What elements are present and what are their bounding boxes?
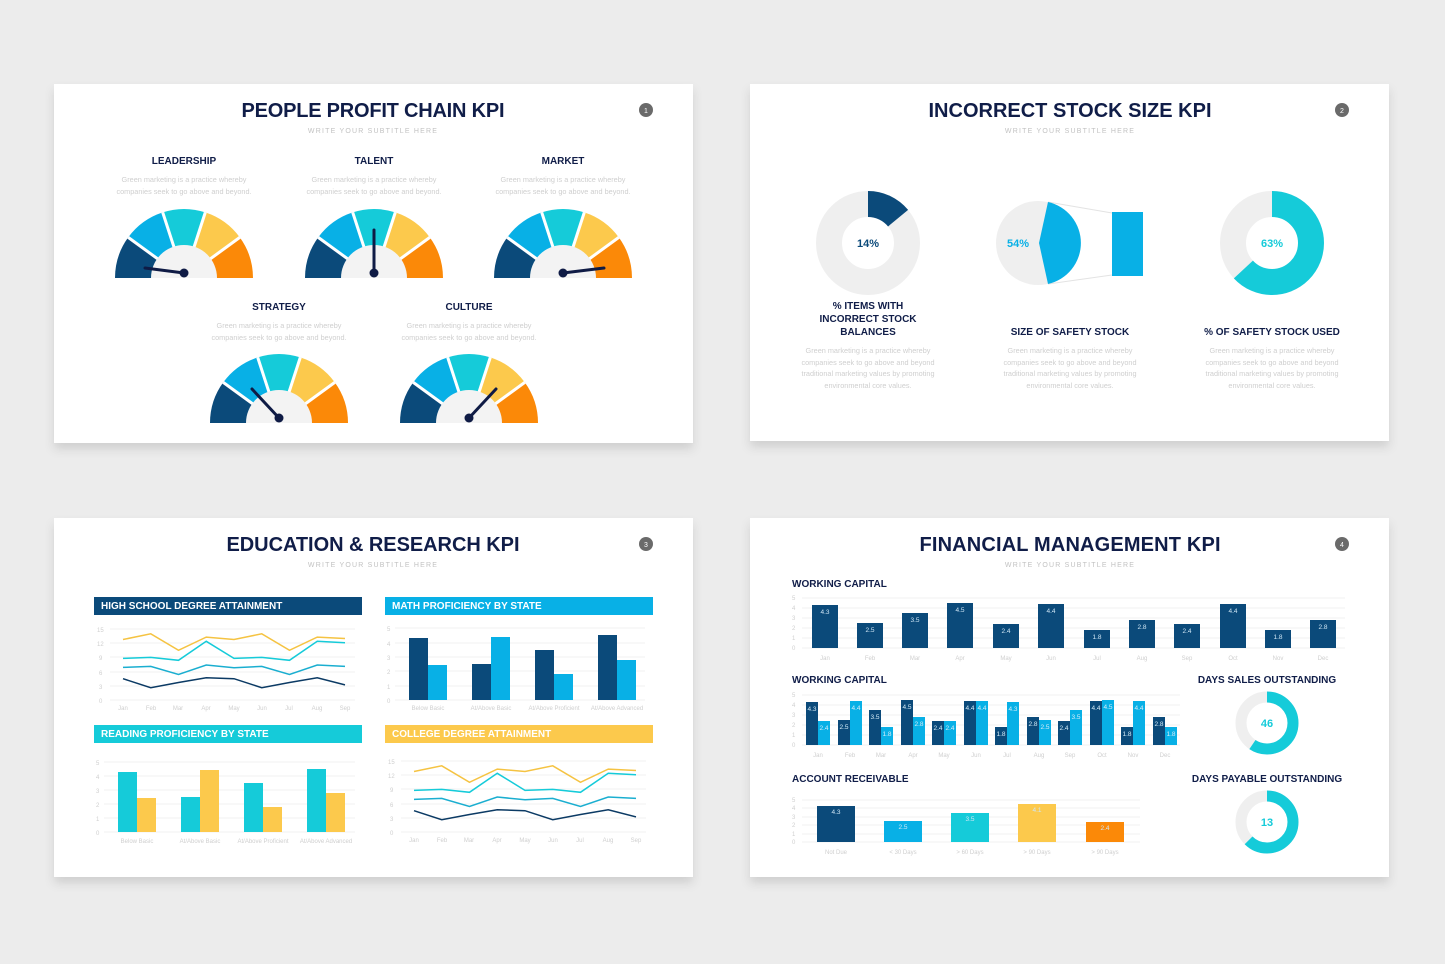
chart: college degree attainment: Feb bbox=[437, 838, 448, 844]
chart: math proficiency: At/Above Basic bbox=[471, 706, 511, 712]
text: size of safety stock: companies seek to go above and beyond bbox=[1003, 358, 1137, 367]
chart: working capital 2 bbox=[792, 675, 1180, 759]
chart: reading proficiency: 4 bbox=[96, 775, 100, 781]
chart: account receivable: ACCOUNT RECEIVABLE bbox=[792, 774, 909, 785]
chart: working capital 2: Jan bbox=[813, 753, 823, 759]
text: safety stock used: % OF SAFETY STOCK USED bbox=[1204, 327, 1340, 338]
page badge: 3 bbox=[644, 542, 648, 549]
chart: reading proficiency: 1 bbox=[96, 817, 100, 823]
page badge bbox=[1335, 103, 1349, 117]
chart: college degree attainment: 12 bbox=[388, 774, 395, 780]
chart: reading proficiency: Below Basic bbox=[121, 839, 153, 845]
chart: working capital 2: 2.4 bbox=[933, 725, 943, 732]
chart: college degree attainment: May bbox=[519, 838, 531, 844]
chart: high school degree attainment: Sep bbox=[340, 706, 351, 712]
chart: working capital 2: 1.8 bbox=[1166, 731, 1176, 738]
chart: working capital 2: 0 bbox=[792, 743, 796, 749]
chart: working capital 2: 4.4 bbox=[977, 705, 987, 712]
chart: math proficiency: At/Above Proficient bbox=[528, 706, 580, 712]
gauge: market bbox=[494, 156, 632, 278]
chart: account receivable: 1 bbox=[792, 832, 796, 838]
text: size of safety stock: traditional marketing values by promoting bbox=[1003, 369, 1137, 378]
chart: working capital 1: Nov bbox=[1273, 656, 1283, 662]
chart: working capital 2: 2.8 bbox=[1028, 721, 1038, 728]
panel: incorrect stock size bbox=[750, 84, 1389, 441]
chart: working capital 1: Oct bbox=[1228, 656, 1238, 662]
chart: math proficiency: At/Above Advanced bbox=[591, 706, 643, 712]
donut: days payable outstanding bbox=[1192, 774, 1342, 848]
chart: college degree attainment bbox=[385, 725, 653, 844]
chart: reading proficiency: At/Above Proficient bbox=[237, 839, 289, 845]
chart: working capital 1: 2.5 bbox=[865, 627, 875, 634]
gauge: talent: Green marketing is a practice whereby bbox=[312, 175, 437, 184]
chart: college degree attainment: Apr bbox=[492, 838, 502, 844]
chart: college degree attainment: Sep bbox=[631, 838, 642, 844]
chart: working capital 2: 2.8 bbox=[1154, 721, 1164, 728]
title: FINANCIAL MANAGEMENT KPI bbox=[920, 534, 1220, 556]
chart: working capital 2: Feb bbox=[845, 753, 856, 759]
subtitle: WRITE YOUR SUBTITLE HERE bbox=[308, 128, 438, 135]
chart: math proficiency bbox=[385, 597, 653, 712]
chart: high school degree attainment: May bbox=[228, 706, 240, 712]
page badge bbox=[1335, 537, 1349, 551]
chart: high school degree attainment: Feb bbox=[146, 706, 157, 712]
chart: reading proficiency: At/Above Basic bbox=[180, 839, 220, 845]
gauge: strategy: companies seek to go above and beyond. bbox=[211, 333, 347, 342]
text: items with incorrect stock: environmental core values. bbox=[824, 381, 912, 390]
chart: working capital 1: Dec bbox=[1318, 656, 1328, 662]
subtitle: WRITE YOUR SUBTITLE HERE bbox=[1005, 128, 1135, 135]
title: INCORRECT STOCK SIZE KPI bbox=[928, 100, 1212, 122]
chart: working capital 2: 2.5 bbox=[839, 724, 849, 731]
chart: working capital 2: 4.4 bbox=[851, 705, 861, 712]
chart: working capital 2: Aug bbox=[1034, 753, 1044, 759]
chart: working capital 2: 4 bbox=[792, 703, 796, 709]
chart: math proficiency: 5 bbox=[387, 627, 391, 633]
text: size of safety stock bbox=[1003, 327, 1137, 390]
chart: working capital 1: 2.8 bbox=[1137, 624, 1147, 631]
chart: working capital 1: 3.5 bbox=[910, 617, 920, 624]
chart: account receivable: Not Due bbox=[825, 850, 848, 856]
page badge: 2 bbox=[1340, 108, 1344, 115]
chart: working capital 1: 1.8 bbox=[1092, 634, 1102, 641]
chart: working capital 1: Aug bbox=[1137, 656, 1147, 662]
chart: working capital 1: 2.8 bbox=[1318, 624, 1328, 631]
chart: working capital 2: 4.3 bbox=[1008, 706, 1018, 713]
chart: working capital 2: 1.8 bbox=[1122, 731, 1132, 738]
chart: working capital 1: 4.5 bbox=[955, 607, 965, 614]
chart: high school degree attainment: 9 bbox=[99, 656, 103, 662]
chart: account receivable: 5 bbox=[792, 798, 796, 804]
chart: working capital 2: Dec bbox=[1160, 753, 1170, 759]
text: items with incorrect stock bbox=[801, 301, 935, 390]
donut: 63%: 63% bbox=[1261, 238, 1283, 250]
chart: working capital 2: 1.8 bbox=[882, 731, 892, 738]
chart: working capital 2: 2 bbox=[792, 723, 796, 729]
chart: working capital 1: 2.4 bbox=[1182, 628, 1192, 635]
chart: working capital 1: Jan bbox=[820, 656, 830, 662]
donut: 63% bbox=[1233, 204, 1311, 282]
chart: working capital 2: 4.4 bbox=[1091, 705, 1101, 712]
chart: working capital 2: 2.4 bbox=[1059, 725, 1069, 732]
chart: account receivable: 4 bbox=[792, 806, 796, 812]
chart: reading proficiency: 5 bbox=[96, 761, 100, 767]
donut: days sales outstanding: DAYS SALES OUTSTANDING bbox=[1198, 675, 1336, 686]
chart: college degree attainment: COLLEGE DEGREE ATTAINMENT bbox=[392, 729, 551, 740]
chart: college degree attainment: 9 bbox=[390, 788, 394, 794]
text: safety stock used: environmental core values. bbox=[1228, 381, 1316, 390]
chart: math proficiency: 4 bbox=[387, 642, 391, 648]
chart: high school degree attainment: Jul bbox=[285, 706, 293, 712]
chart: math proficiency: 1 bbox=[387, 685, 391, 691]
chart: working capital 2: 1.8 bbox=[996, 731, 1006, 738]
page badge: 4 bbox=[1340, 542, 1344, 549]
chart: working capital 2: Oct bbox=[1097, 753, 1107, 759]
subtitle: WRITE YOUR SUBTITLE HERE bbox=[308, 562, 438, 569]
chart: high school degree attainment: 0 bbox=[99, 699, 103, 705]
gauge: market: Green marketing is a practice whereby bbox=[501, 175, 626, 184]
chart: college degree attainment: 6 bbox=[390, 803, 394, 809]
chart: account receivable: > 90 Days bbox=[1023, 850, 1051, 856]
chart: working capital 2: 2.5 bbox=[1040, 724, 1050, 731]
text: items with incorrect stock: % ITEMS WITH bbox=[833, 301, 903, 312]
gauge: strategy bbox=[210, 302, 348, 423]
text: items with incorrect stock: BALANCES bbox=[840, 327, 896, 338]
gauge: culture: companies seek to go above and beyond. bbox=[401, 333, 537, 342]
chart: high school degree attainment: Apr bbox=[201, 706, 211, 712]
chart: account receivable: 4.3 bbox=[831, 809, 841, 816]
chart: working capital 1: 0 bbox=[792, 646, 796, 652]
chart: high school degree attainment: Aug bbox=[312, 706, 322, 712]
chart: working capital 2: 2.8 bbox=[914, 721, 924, 728]
text: size of safety stock: environmental core values. bbox=[1026, 381, 1114, 390]
chart: account receivable: 2 bbox=[792, 823, 796, 829]
chart: high school degree attainment: 6 bbox=[99, 671, 103, 677]
chart: high school degree attainment: 15 bbox=[97, 628, 104, 634]
chart: size of safety stock bbox=[996, 201, 1143, 285]
chart: high school degree attainment: Jan bbox=[118, 706, 128, 712]
gauge: leadership: Green marketing is a practice whereby bbox=[122, 175, 247, 184]
chart: math proficiency: 2 bbox=[387, 670, 391, 676]
chart: working capital 1: 4.3 bbox=[820, 609, 830, 616]
chart: reading proficiency: 3 bbox=[96, 789, 100, 795]
text: items with incorrect stock: traditional marketing values by promoting bbox=[801, 369, 935, 378]
donut: 14% bbox=[829, 204, 907, 282]
chart: size of safety stock: 54% bbox=[1007, 238, 1029, 250]
chart: account receivable: 3.5 bbox=[965, 816, 975, 823]
gauge: market: companies seek to go above and beyond. bbox=[495, 187, 631, 196]
chart: working capital 1: Apr bbox=[955, 656, 965, 662]
chart: college degree attainment: Jul bbox=[576, 838, 584, 844]
chart: working capital 2: 3.5 bbox=[1071, 714, 1081, 721]
chart: account receivable: 4.1 bbox=[1032, 807, 1042, 814]
chart: working capital 1: Mar bbox=[910, 656, 920, 662]
text: items with incorrect stock: INCORRECT STOCK bbox=[819, 314, 917, 325]
chart: working capital 1: 1.8 bbox=[1273, 634, 1283, 641]
chart: account receivable: > 60 Days bbox=[956, 850, 984, 856]
chart: account receivable: > 90 Days bbox=[1091, 850, 1119, 856]
text: safety stock used: traditional marketing values by promoting bbox=[1205, 369, 1339, 378]
chart: working capital 2: Jun bbox=[971, 753, 981, 759]
title: EDUCATION & RESEARCH KPI bbox=[226, 534, 520, 556]
gauge: talent: companies seek to go above and beyond. bbox=[306, 187, 442, 196]
gauge: strategy: Green marketing is a practice whereby bbox=[217, 321, 342, 330]
chart: math proficiency: MATH PROFICIENCY BY STATE bbox=[392, 601, 542, 612]
chart: working capital 2: 5 bbox=[792, 693, 796, 699]
text: items with incorrect stock: companies seek to go above and beyond bbox=[801, 358, 935, 367]
chart: working capital 2: 4.4 bbox=[965, 705, 975, 712]
chart: high school degree attainment: 3 bbox=[99, 685, 103, 691]
chart: working capital 2: Mar bbox=[876, 753, 886, 759]
chart: working capital 1: Jul bbox=[1093, 656, 1101, 662]
chart: reading proficiency: At/Above Advanced bbox=[300, 839, 352, 845]
chart: working capital 1: 4.4 bbox=[1228, 608, 1238, 615]
chart: working capital 1: 3 bbox=[792, 616, 796, 622]
chart: working capital 1: WORKING CAPITAL bbox=[792, 579, 887, 590]
chart: working capital 2: 4.4 bbox=[1134, 705, 1144, 712]
chart: working capital 2: 1 bbox=[792, 733, 796, 739]
gauge: strategy: STRATEGY bbox=[252, 302, 306, 313]
gauge: culture: CULTURE bbox=[445, 302, 493, 313]
gauge: market: MARKET bbox=[542, 156, 584, 167]
chart: high school degree attainment bbox=[94, 597, 362, 712]
chart: working capital 1: 2 bbox=[792, 626, 796, 632]
title: PEOPLE PROFIT CHAIN KPI bbox=[242, 100, 504, 122]
chart: working capital 2: 2.4 bbox=[819, 725, 829, 732]
chart: math proficiency: 0 bbox=[387, 699, 391, 705]
gauge: talent: TALENT bbox=[355, 156, 393, 167]
chart: working capital 1: 2.4 bbox=[1001, 628, 1011, 635]
gauge: leadership: LEADERSHIP bbox=[152, 156, 217, 167]
text: safety stock used bbox=[1204, 327, 1340, 390]
chart: working capital 2: 2.4 bbox=[945, 725, 955, 732]
text: safety stock used: companies seek to go above and beyond bbox=[1205, 358, 1339, 367]
chart: high school degree attainment: 12 bbox=[97, 642, 104, 648]
chart: working capital 2: WORKING CAPITAL bbox=[792, 675, 887, 686]
panel: people profit chain bbox=[54, 84, 693, 443]
panel: financial management bbox=[750, 518, 1389, 877]
chart: math proficiency: 3 bbox=[387, 656, 391, 662]
chart: account receivable: 0 bbox=[792, 840, 796, 846]
subtitle: WRITE YOUR SUBTITLE HERE bbox=[1005, 562, 1135, 569]
chart: working capital 2: 4.5 bbox=[1103, 704, 1113, 711]
gauge: leadership bbox=[115, 156, 253, 278]
gauge: culture bbox=[400, 302, 538, 423]
chart: working capital 1: Sep bbox=[1182, 656, 1193, 662]
chart: working capital 2: Sep bbox=[1065, 753, 1076, 759]
gauge: talent bbox=[305, 156, 443, 278]
chart: college degree attainment: Jan bbox=[409, 838, 419, 844]
chart: working capital 1: 1 bbox=[792, 636, 796, 642]
page badge bbox=[639, 537, 653, 551]
chart: working capital 1: 5 bbox=[792, 596, 796, 602]
chart: working capital 1: Jun bbox=[1046, 656, 1056, 662]
chart: high school degree attainment: Mar bbox=[173, 706, 183, 712]
chart: working capital 2: Nov bbox=[1128, 753, 1138, 759]
chart: account receivable: < 30 Days bbox=[889, 850, 917, 856]
chart: working capital 1: May bbox=[1000, 656, 1012, 662]
chart: high school degree attainment: Jun bbox=[257, 706, 267, 712]
chart: working capital 2: 4.5 bbox=[902, 704, 912, 711]
gauge: culture: Green marketing is a practice whereby bbox=[407, 321, 532, 330]
chart: reading proficiency bbox=[94, 725, 362, 845]
chart: college degree attainment: 15 bbox=[388, 760, 395, 766]
donut: days sales outstanding bbox=[1198, 675, 1336, 749]
chart: college degree attainment: Aug bbox=[603, 838, 613, 844]
chart: working capital 2: 3.5 bbox=[870, 714, 880, 721]
chart: college degree attainment: Jun bbox=[548, 838, 558, 844]
donut: days sales outstanding: 46 bbox=[1261, 718, 1273, 730]
chart: working capital 2: May bbox=[938, 753, 950, 759]
donut: 14%: 14% bbox=[857, 238, 879, 250]
chart: reading proficiency: 2 bbox=[96, 803, 100, 809]
chart: working capital 1: Feb bbox=[865, 656, 876, 662]
chart: account receivable: 3 bbox=[792, 815, 796, 821]
chart: reading proficiency: 0 bbox=[96, 831, 100, 837]
donut: days payable outstanding: DAYS PAYABLE OUTSTANDING bbox=[1192, 774, 1342, 785]
text: safety stock used: Green marketing is a practice whereby bbox=[1210, 346, 1335, 355]
chart: account receivable: 2.5 bbox=[898, 824, 908, 831]
chart: college degree attainment: 0 bbox=[390, 831, 394, 837]
chart: reading proficiency: READING PROFICIENCY BY STATE bbox=[101, 729, 269, 740]
chart: college degree attainment: Mar bbox=[464, 838, 474, 844]
text: items with incorrect stock: Green marketing is a practice whereby bbox=[806, 346, 931, 355]
panel: education & research bbox=[54, 518, 693, 877]
chart: account receivable bbox=[792, 774, 1140, 856]
chart: account receivable: 2.4 bbox=[1100, 825, 1110, 832]
chart: working capital 2: Jul bbox=[1003, 753, 1011, 759]
page badge bbox=[639, 103, 653, 117]
donut: days payable outstanding: 13 bbox=[1261, 817, 1273, 829]
chart: working capital 1: 4.4 bbox=[1046, 608, 1056, 615]
chart: college degree attainment: 3 bbox=[390, 817, 394, 823]
page badge: 1 bbox=[644, 108, 648, 115]
text: size of safety stock: Green marketing is a practice whereby bbox=[1008, 346, 1133, 355]
chart: high school degree attainment: HIGH SCHOOL DEGREE ATTAINMENT bbox=[101, 601, 282, 612]
chart: working capital 1 bbox=[792, 579, 1345, 662]
text: size of safety stock: SIZE OF SAFETY STOCK bbox=[1011, 327, 1130, 338]
chart: working capital 2: 3 bbox=[792, 713, 796, 719]
chart: math proficiency: Below Basic bbox=[412, 706, 444, 712]
chart: working capital 2: Apr bbox=[908, 753, 918, 759]
chart: working capital 1: 4 bbox=[792, 606, 796, 612]
chart: working capital 2: 4.3 bbox=[807, 706, 817, 713]
gauge: leadership: companies seek to go above and beyond. bbox=[116, 187, 252, 196]
